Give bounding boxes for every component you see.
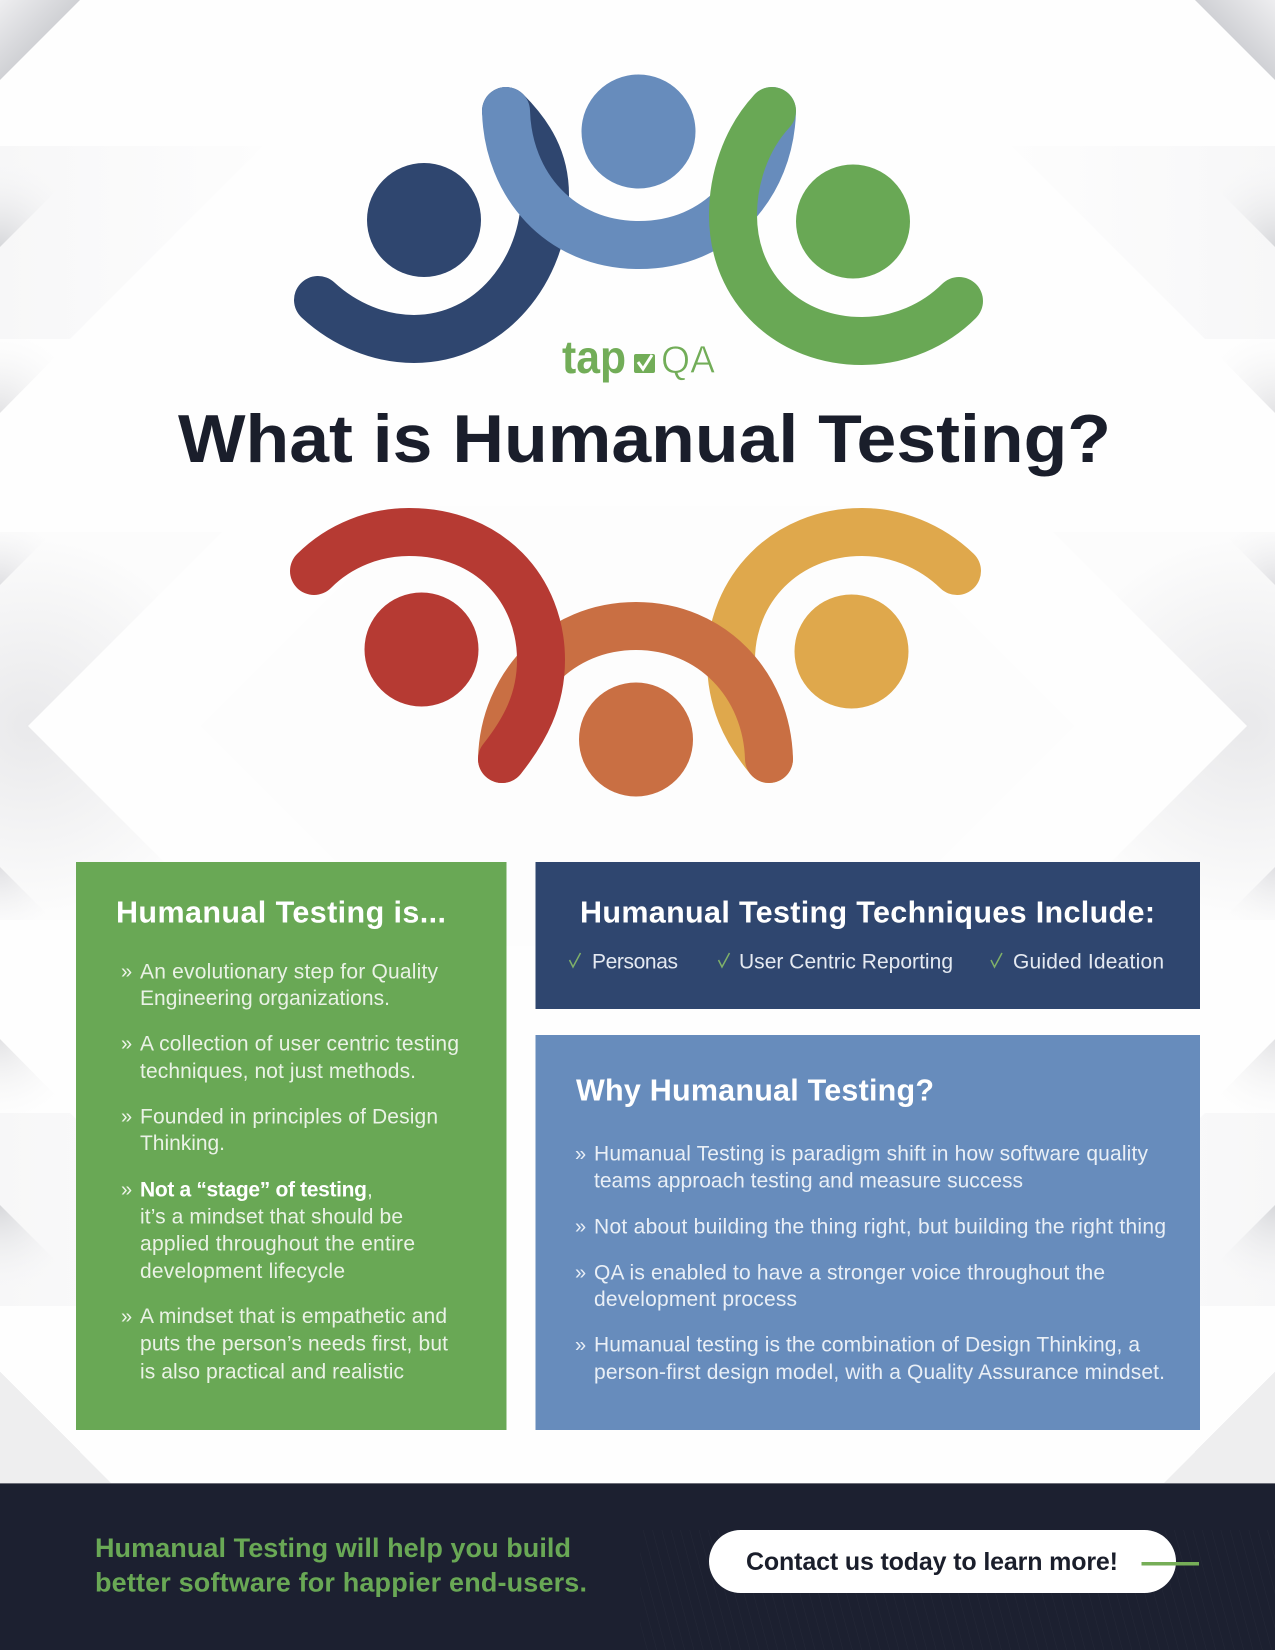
bullet: evolutionary step <box>121 960 438 1010</box>
logo: tapQA: QA <box>661 339 715 382</box>
footer band <box>0 1483 1275 1650</box>
arrow line <box>1142 1562 1199 1566</box>
bullet: empathetic mindset <box>121 1305 448 1383</box>
call to action button <box>709 1530 1176 1593</box>
bullet: design thinking: » <box>121 1106 132 1128</box>
footer tagline: Humanual Testing will help you build <box>95 1533 571 1563</box>
bullet: collection of techniques <box>121 1032 459 1083</box>
heading: Humanual Testing Techniques Include: <box>580 896 1155 930</box>
bullet: stronger voice: QA is enabled to have a stronger voice throughout the <box>594 1261 1105 1284</box>
bullet: paradigm shift: » <box>575 1144 586 1166</box>
bullet: collection of techniques: A collection of user centric testing <box>140 1032 459 1055</box>
bullet: empathetic mindset: puts the person’s needs first, but <box>140 1332 448 1355</box>
bullet: not a stage of testing <box>121 1178 415 1283</box>
bullet: not a stage of testing: applied throughout the entire <box>140 1232 415 1255</box>
panel: why <box>536 1035 1200 1430</box>
bullet: not a stage of testing: » <box>121 1179 132 1201</box>
bullet: design thinking: Founded in principles of Design <box>140 1105 438 1128</box>
icon: green person <box>733 111 959 341</box>
title: What is Humanual Testing? <box>178 401 1111 477</box>
technique: user centric reporting: User Centric Reporting <box>739 950 953 973</box>
bullet: design thinking combination: Humanual testing is the combination of Design Thinking, a <box>594 1334 1140 1357</box>
bullet: not a stage of testing: , <box>367 1178 373 1201</box>
bullet: collection of techniques: » <box>121 1033 132 1055</box>
icon: red person <box>314 532 541 759</box>
top people illustration <box>318 74 959 341</box>
footer tagline: better software for happier end-users. <box>95 1568 587 1598</box>
bullet: not a stage of testing: Not a “stage” of testing <box>140 1178 367 1201</box>
heading: Humanual Testing is... <box>116 896 446 930</box>
bullet: stronger voice <box>575 1261 1105 1311</box>
panel: techniques <box>536 862 1200 1009</box>
bullet: design thinking combination: » <box>575 1334 586 1356</box>
icon: navy person <box>318 111 545 339</box>
bottom people illustration <box>314 532 957 796</box>
footer tagline <box>95 1533 587 1598</box>
call to action button: Contact us today to learn more! <box>746 1548 1118 1576</box>
heading: Why Humanual Testing? <box>576 1074 934 1108</box>
icon: orange person <box>502 626 769 796</box>
bullet: right thing: » <box>575 1216 586 1238</box>
technique: personas: Personas <box>592 950 678 973</box>
bullet: collection of techniques: techniques, not just methods. <box>140 1060 416 1083</box>
bullet: empathetic mindset: is also practical and realistic <box>140 1360 404 1383</box>
bullet: right thing: Not about building the thing right, but building the right thing <box>594 1215 1166 1238</box>
bullet: evolutionary step: An evolutionary step for Quality <box>140 960 438 983</box>
logo: tapQA <box>562 331 715 383</box>
bullet: design thinking combination: person-first design model, with a Quality Assurance mindset. <box>594 1361 1165 1384</box>
bullet: design thinking <box>121 1105 438 1155</box>
bullet: empathetic mindset: A mindset that is empathetic and <box>140 1305 447 1328</box>
bullet: evolutionary step: Engineering organizations. <box>140 987 390 1010</box>
bullet: stronger voice: development process <box>594 1288 797 1311</box>
bullet: design thinking combination <box>575 1334 1165 1384</box>
panel: Humanual Testing is <box>76 862 506 1430</box>
bullet: design thinking: Thinking. <box>140 1132 225 1155</box>
bullet: paradigm shift: teams approach testing and measure success <box>594 1170 1023 1193</box>
icon: yellow person <box>731 532 957 759</box>
bullet: stronger voice: » <box>575 1262 586 1284</box>
bullet: paradigm shift <box>575 1143 1148 1193</box>
bullet: empathetic mindset: » <box>121 1306 132 1328</box>
logo: tapQA: tap <box>562 331 626 383</box>
bullet: not a stage of testing: development lifecycle <box>140 1260 345 1283</box>
icon: light blue person <box>506 74 772 245</box>
bullet: paradigm shift: Humanual Testing is paradigm shift in how software quality <box>594 1143 1148 1166</box>
bullet: not a stage of testing: it’s a mindset that should be <box>140 1205 403 1228</box>
bullet: evolutionary step: » <box>121 961 132 983</box>
technique: guided ideation: Guided Ideation <box>1013 950 1164 973</box>
